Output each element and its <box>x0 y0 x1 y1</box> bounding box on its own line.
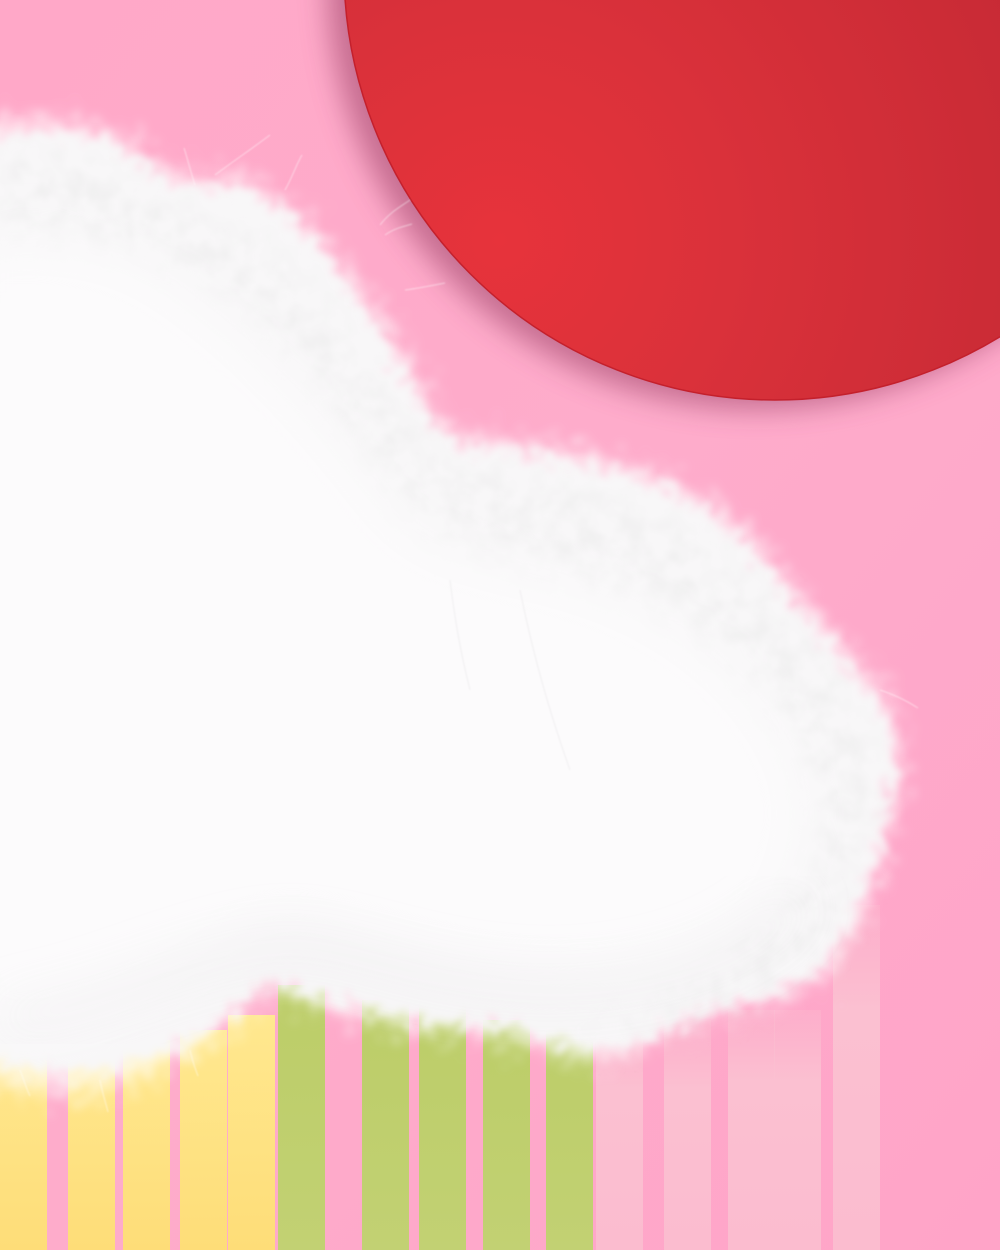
cloud: white feather cloud <box>0 118 918 1112</box>
cloud fringe texture <box>690 984 798 1028</box>
cloud feather wisps <box>20 135 918 1112</box>
cloud halo wisps <box>0 118 902 1093</box>
stripes: rain of coloured bands <box>0 905 880 1250</box>
red sun disc <box>344 0 1000 400</box>
cloud base crease <box>0 900 800 1020</box>
sun shadow <box>327 0 1000 409</box>
cloud body <box>0 245 803 1030</box>
stripes: yellow <box>0 1015 275 1250</box>
cloud fringe <box>0 131 895 1073</box>
stripes: green <box>278 985 593 1250</box>
stripes: pale pink <box>596 905 880 1250</box>
